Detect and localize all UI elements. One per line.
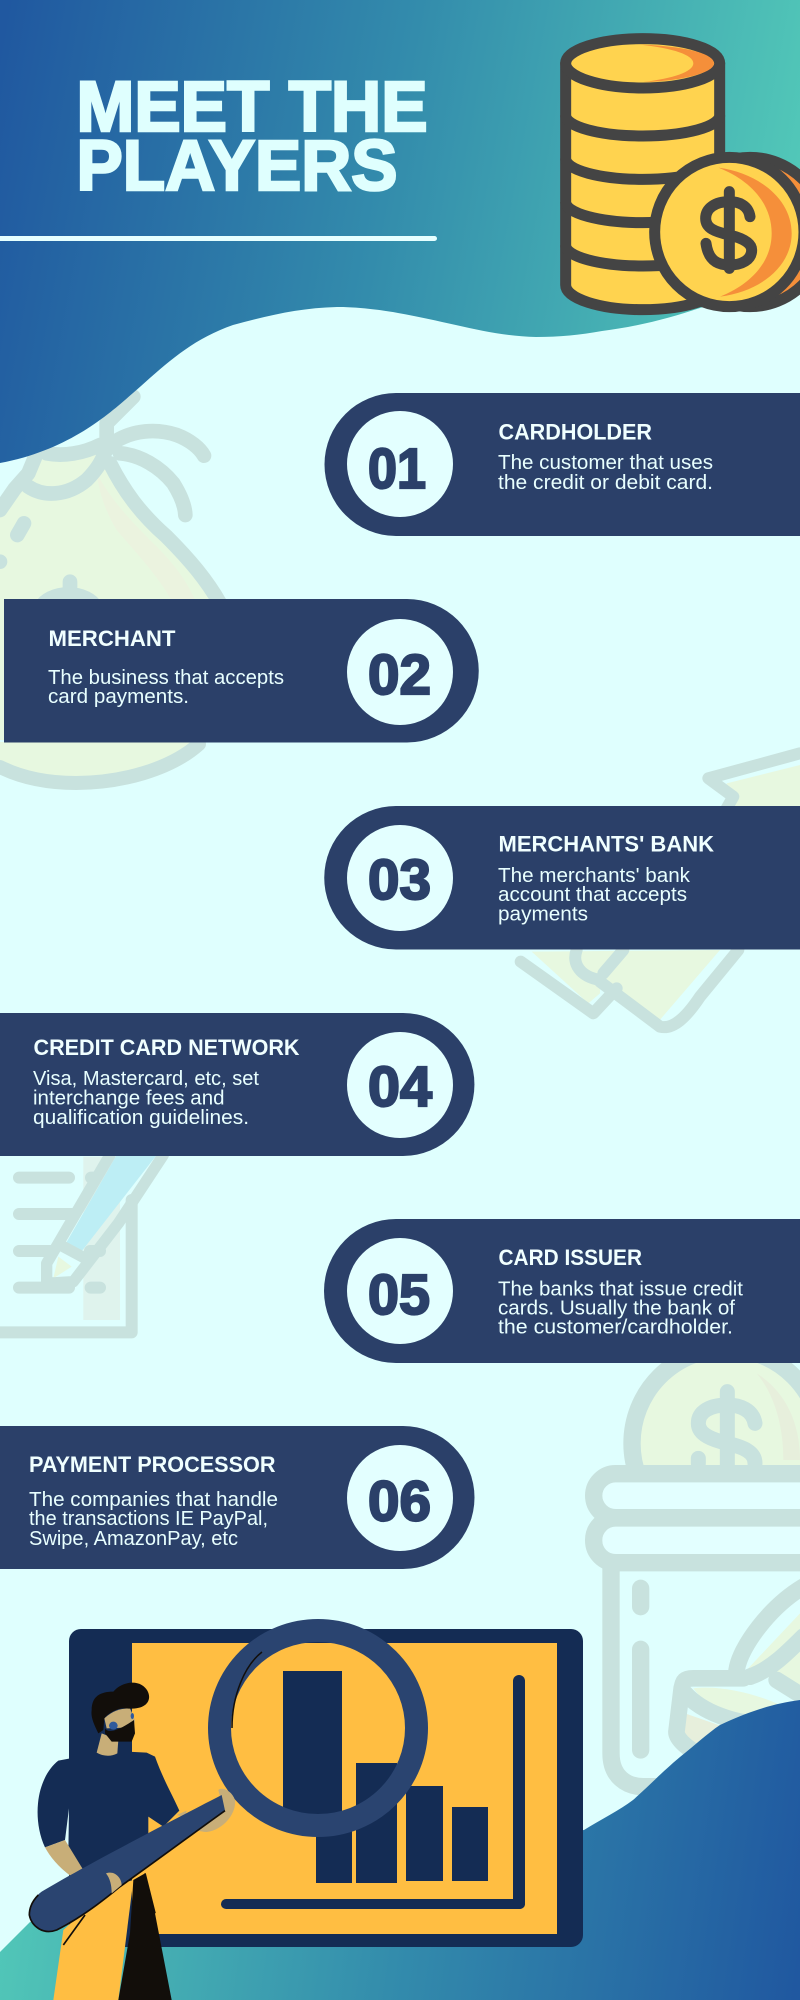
panel: 06 payment processor: the transactions IE PayPal, xyxy=(29,1508,268,1530)
icon: back coin xyxy=(675,157,800,307)
panel: 06 payment processor: The companies that handle xyxy=(29,1489,278,1511)
panel: 05 card issuer: cards. Usually the bank of xyxy=(498,1298,735,1320)
icon: faded dollar sign xyxy=(698,1392,755,1465)
panel: 05 card issuer: 05 xyxy=(368,1263,430,1327)
panel: 01 cardholder: 01 xyxy=(368,437,426,501)
panel: 05 card issuer: The banks that issue credit xyxy=(498,1278,743,1300)
panel: 04 credit card network: 04 xyxy=(368,1055,432,1119)
panel: 06 payment processor: PAYMENT PROCESSOR xyxy=(29,1452,276,1477)
icon: faded money bills xyxy=(521,753,800,1027)
panel: 04 credit card network: interchange fees and xyxy=(33,1088,224,1110)
title: PLAYERS xyxy=(76,127,398,206)
panel: 02 merchant xyxy=(4,599,479,742)
panel: 04 credit card network: CREDIT CARD NETWORK xyxy=(34,1035,300,1060)
panel: 02 merchant: MERCHANT xyxy=(48,626,176,651)
panel: 06 payment processor: 06 xyxy=(368,1470,431,1534)
person thumb xyxy=(106,1873,122,1893)
panel: 03 merchants' bank: account that accepts xyxy=(498,884,687,906)
panel: 02 merchant: card payments. xyxy=(48,686,189,708)
panel: 01 cardholder: CARDHOLDER xyxy=(498,420,652,444)
panel: 04 credit card network: qualification guidelines. xyxy=(33,1107,249,1129)
panel: 03 merchants' bank: The merchants' bank xyxy=(498,865,691,887)
panel: 03 merchants' bank: payments xyxy=(498,904,588,926)
icon: faded money bag xyxy=(0,397,227,783)
magnifier handle xyxy=(29,1795,225,1931)
panel: 06 payment processor: Swipe, AmazonPay, etc xyxy=(29,1528,238,1550)
icon: coin stack xyxy=(566,39,800,310)
panel: 03 merchants' bank: 03 xyxy=(368,848,431,912)
person hand xyxy=(177,1789,235,1832)
header gradient wave xyxy=(0,0,800,463)
person face xyxy=(104,1708,135,1728)
person forearm xyxy=(45,1840,83,1876)
illustration: person holding magnifier xyxy=(29,1683,235,2000)
panel: 02 merchant: The business that accepts xyxy=(48,667,284,689)
title: MEET THE xyxy=(76,68,428,147)
bar chart xyxy=(221,1671,525,1909)
panel: 05 card issuer xyxy=(324,1219,800,1363)
panel: 01 cardholder: The customer that uses xyxy=(498,452,713,474)
person neck xyxy=(97,1733,118,1756)
icon: faded pen and paper xyxy=(0,1155,163,1332)
icon: dollar sign xyxy=(706,192,752,268)
person hair xyxy=(91,1683,149,1733)
title xyxy=(76,68,428,206)
title underline xyxy=(0,236,437,241)
icon: faded jar of coins xyxy=(594,1349,800,1787)
panel: 05 card issuer: CARD ISSUER xyxy=(498,1245,642,1270)
panel: 04 credit card network: Visa, Mastercard, etc, set xyxy=(33,1068,259,1090)
icon: front coin xyxy=(655,157,800,307)
panel: 01 cardholder xyxy=(324,393,800,536)
panel: 03 merchants' bank xyxy=(324,806,800,950)
panel: 04 credit card network xyxy=(0,1013,474,1156)
magnifier ring xyxy=(220,1630,416,1826)
panel: 02 merchant: 02 xyxy=(368,643,431,707)
panel: 05 card issuer: the customer/cardholder. xyxy=(498,1316,733,1338)
panel: 06 payment processor xyxy=(0,1426,474,1569)
person legs xyxy=(53,1880,133,2000)
panel: 01 cardholder: the credit or debit card. xyxy=(498,472,713,494)
illustration: monitor with bar chart xyxy=(69,1629,583,1947)
footer gradient wave xyxy=(0,1700,800,2000)
person shirt xyxy=(38,1752,179,1870)
panel: 03 merchants' bank: MERCHANTS' BANK xyxy=(498,832,715,856)
